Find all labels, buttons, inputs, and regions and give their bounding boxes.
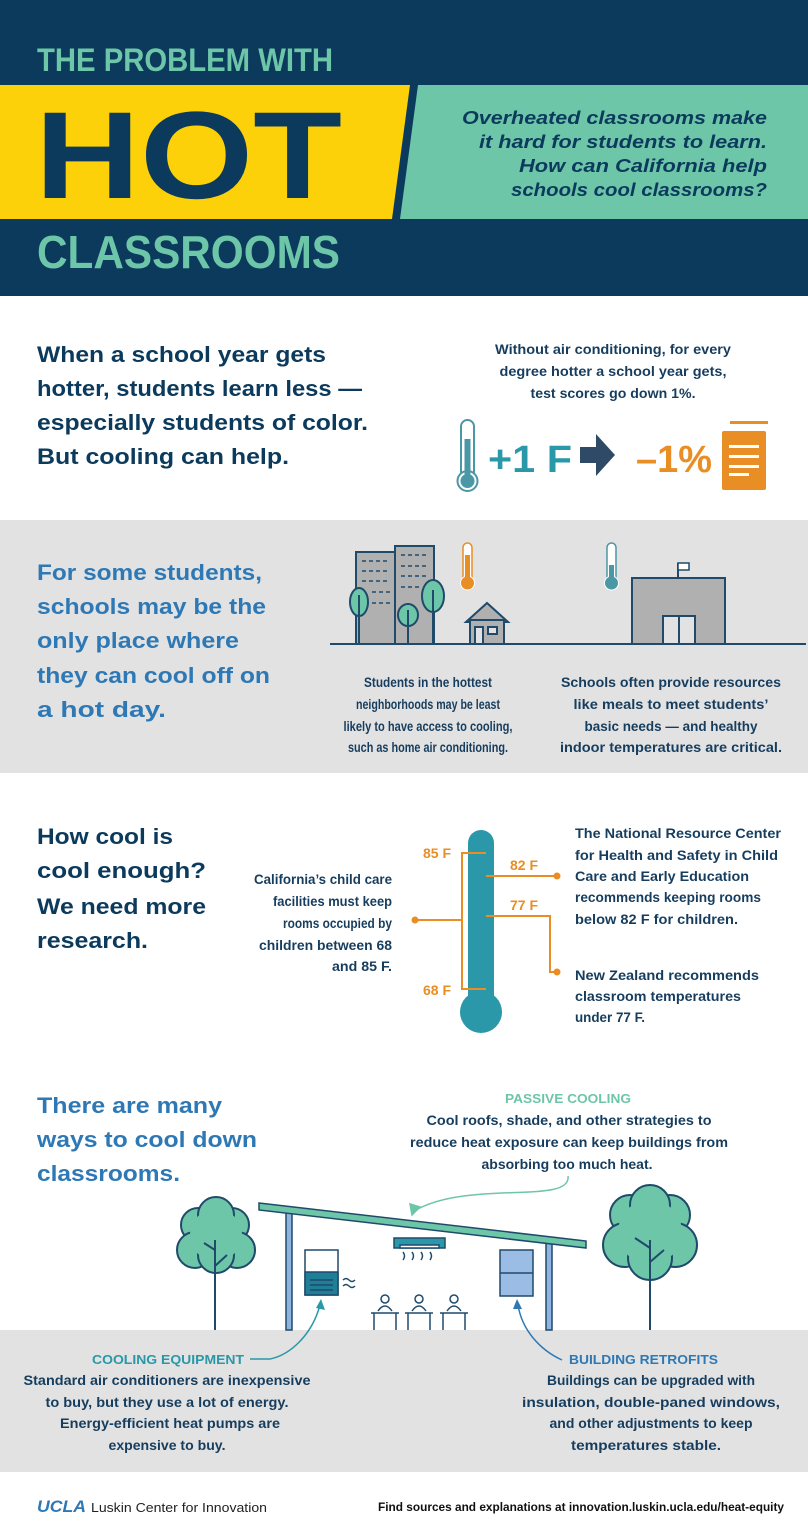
section 1 stat text: test scores go down 1%.: [530, 385, 696, 401]
section 1 heading: When a school year gets: [37, 342, 326, 367]
chart: temperature thermometer: 68 F: [423, 982, 451, 998]
icon: thermometer teal: [458, 420, 478, 491]
subtitle question: it hard for students to learn.: [479, 132, 767, 152]
callout: passive cooling: Cool roofs, shade, and other strategies to: [426, 1112, 712, 1128]
illustration: city and house: [330, 546, 806, 644]
callout: cooling equipment: Standard air conditioners are inexpensive: [24, 1372, 311, 1388]
chart: temperature thermometer: 77 F: [510, 897, 538, 913]
text: new zealand: New Zealand recommends: [575, 967, 759, 983]
section 3 heading: [37, 824, 206, 953]
heading: they can cool off on: [37, 663, 270, 688]
callout: cooling equipment: Energy-efficient heat pumps are: [60, 1415, 280, 1431]
callout: cooling equipment: COOLING EQUIPMENT: [92, 1352, 244, 1367]
footer: sources: Find sources and explanations at innovation.luskin.ucla.edu/heat-equity: [378, 1500, 784, 1514]
footer: logo: [37, 1497, 267, 1516]
text: hottest neighborhoods: Students in the hottest: [364, 674, 492, 690]
text: new zealand: [575, 967, 759, 1025]
section 1 stat text: degree hotter a school year gets,: [500, 363, 726, 379]
subtitle question: schools cool classrooms?: [511, 180, 767, 200]
text: hottest neighborhoods: neighborhoods may be least: [356, 696, 500, 712]
title: the problem with: THE PROBLEM WITH: [37, 42, 333, 78]
arrow: [580, 434, 615, 476]
text: california child care: and 85 F.: [332, 958, 392, 974]
callout: building retrofits: insulation, double-paned windows,: [522, 1394, 780, 1410]
text: california child care: California’s child care: [254, 871, 392, 887]
section 1 heading: [37, 342, 368, 469]
section 4 heading: [36, 1093, 257, 1186]
section 3 heading: cool enough?: [37, 858, 206, 883]
callout: passive cooling: reduce heat exposure can keep buildings from: [410, 1134, 728, 1150]
heading: schools may be the: [37, 594, 266, 619]
text: new zealand: classroom temperatures: [575, 988, 741, 1004]
text: national resource center: The National Resource Center: [575, 825, 782, 841]
section 1 heading: But cooling can help.: [37, 444, 289, 469]
text: california child care: rooms occupied by: [283, 915, 392, 931]
section 1 heading: hotter, students learn less —: [37, 376, 362, 401]
callout: building retrofits: [513, 1299, 780, 1453]
text: national resource center: below 82 F for children.: [575, 911, 738, 927]
footer: logo: UCLA: [37, 1497, 86, 1516]
heading: a hot day.: [37, 697, 166, 722]
section 1 stat text: Without air conditioning, for every: [495, 341, 731, 357]
title: classrooms: CLASSROOMS: [37, 226, 340, 278]
callout: cooling equipment: [24, 1299, 325, 1453]
callout: cooling equipment: expensive to buy.: [108, 1437, 226, 1453]
section 1 stat text: [495, 341, 731, 401]
chart: temperature thermometer: 85 F: [423, 845, 451, 861]
text: hottest neighborhoods: likely to have access to cooling,: [344, 718, 512, 734]
section 4 heading: ways to cool down: [36, 1127, 257, 1152]
callout: building retrofits: Buildings can be upgraded with: [547, 1372, 755, 1388]
icon: orange thermometer: [460, 543, 474, 590]
callout: building retrofits: temperatures stable.: [571, 1437, 721, 1453]
footer: logo: Luskin Center for Innovation: [91, 1500, 267, 1515]
subtitle question: Overheated classrooms make: [462, 108, 767, 128]
subtitle question: [462, 108, 767, 200]
text: schools resources: basic needs — and healthy: [584, 718, 758, 734]
callout: building retrofits: and other adjustments to keep: [550, 1415, 752, 1431]
ceiling AC: [394, 1238, 445, 1248]
callout: passive cooling: absorbing too much heat.: [482, 1156, 652, 1172]
section 3 heading: research.: [37, 928, 148, 953]
callout: passive cooling: [410, 1091, 728, 1172]
window: [500, 1250, 533, 1296]
desks and students: [371, 1295, 468, 1330]
text: national resource center: Care and Early Education: [575, 868, 749, 884]
illustration: classroom building: [177, 1185, 697, 1330]
text: california child care: facilities must keep: [273, 893, 392, 909]
text: national resource center: for Health and Safety in Child: [575, 847, 778, 863]
-1%: –1%: [636, 439, 712, 481]
chart: temperature thermometer: [412, 830, 560, 1033]
title: HOT: HOT: [35, 87, 342, 225]
text: national resource center: [575, 825, 782, 927]
header panel: [0, 0, 808, 296]
subtitle question: How can California help: [519, 156, 767, 176]
trees: [177, 1185, 697, 1280]
text: schools resources: like meals to meet students’: [574, 696, 768, 712]
roof: [259, 1203, 586, 1248]
section 3 heading: We need more: [37, 894, 206, 919]
callout: building retrofits: BUILDING RETROFITS: [569, 1352, 718, 1367]
section 4 heading: classrooms.: [37, 1161, 180, 1186]
heading: [37, 560, 270, 722]
text: hottest neighborhoods: [344, 674, 512, 755]
heading: For some students,: [37, 560, 262, 585]
chart: temperature thermometer: 82 F: [510, 857, 538, 873]
grey ground panel: [0, 1330, 808, 1472]
section 1 heading: especially students of color.: [37, 410, 368, 435]
icon: clipboard: [722, 421, 768, 490]
teal band: [400, 85, 808, 219]
text: new zealand: under 77 F.: [575, 1009, 645, 1025]
icon: teal thermometer: [604, 543, 618, 590]
panel: cooling refuge: [0, 520, 808, 773]
text: schools resources: indoor temperatures are critical.: [560, 739, 782, 755]
text: california child care: children between 68: [259, 937, 392, 953]
text: schools resources: Schools often provide resources: [561, 674, 781, 690]
section 3 heading: How cool is: [37, 824, 173, 849]
+1 F: +1 F: [488, 439, 572, 481]
posts: [286, 1210, 292, 1330]
callout: cooling equipment: to buy, but they use a lot of energy.: [46, 1394, 288, 1410]
arrow: passive cooling: [410, 1176, 568, 1215]
yellow band: [0, 85, 410, 219]
callout: passive cooling: PASSIVE COOLING: [505, 1091, 631, 1106]
heading: only place where: [37, 628, 239, 653]
text: california child care: [254, 871, 392, 974]
text: national resource center: recommends keeping rooms: [575, 889, 761, 905]
text: schools resources: [560, 674, 782, 755]
wall AC: [305, 1250, 338, 1295]
text: hottest neighborhoods: such as home air conditioning.: [348, 739, 508, 755]
section 4 heading: There are many: [37, 1093, 223, 1118]
illustration: school: [632, 563, 725, 644]
